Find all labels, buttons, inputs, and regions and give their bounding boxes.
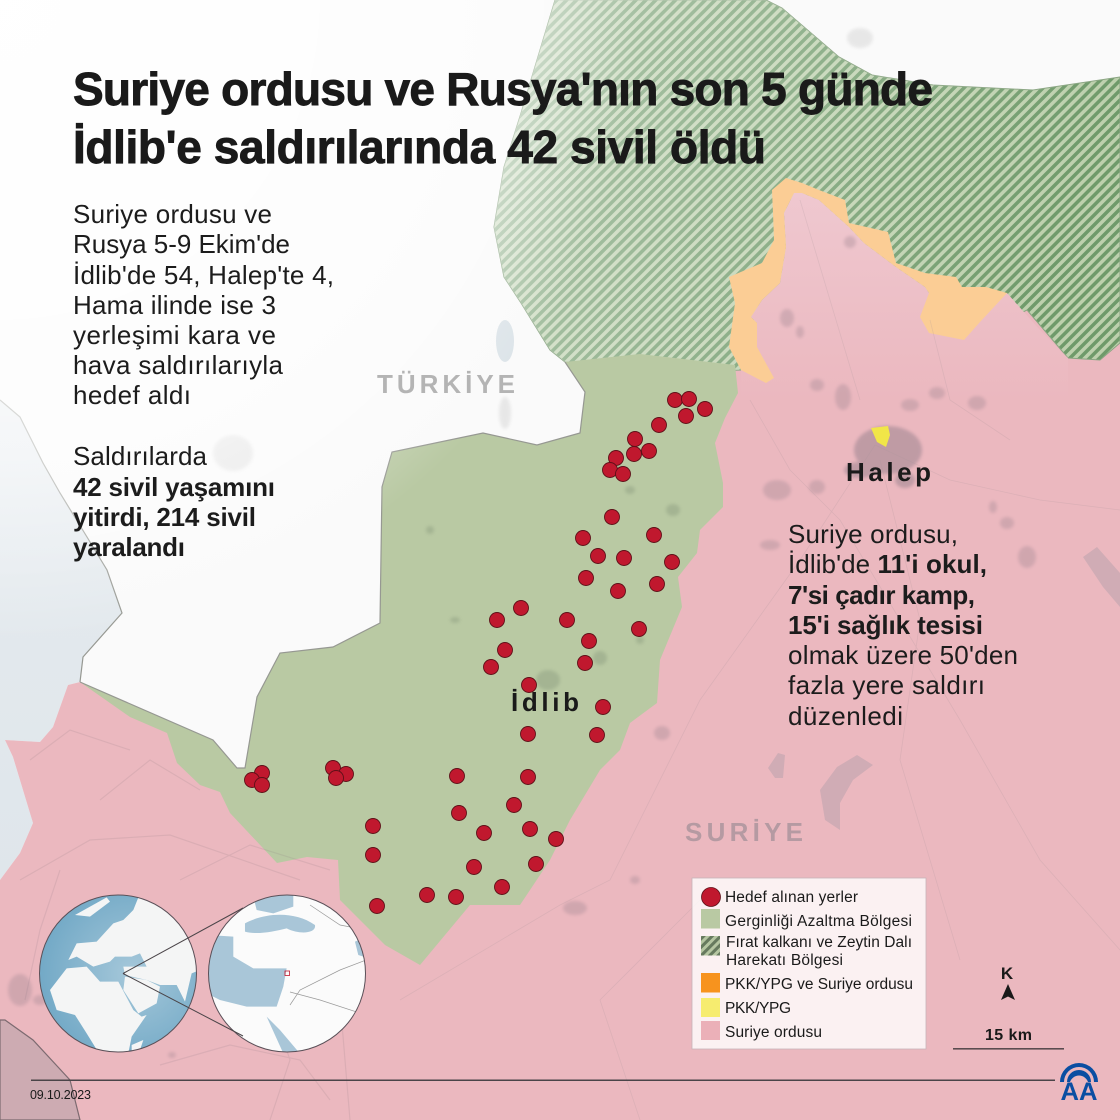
text block: attacks summary: Suriye ordusu ve [73, 199, 272, 229]
Halep yellow area [871, 426, 890, 447]
north arrow [1001, 964, 1015, 1000]
legend: Syrian army [701, 1021, 822, 1041]
title [73, 63, 933, 173]
text block: targets: İdlib'de 11'i okul, [788, 549, 987, 579]
legend: PKK/YPG and Syrian army: PKK/YPG ve Suriye ordusu [725, 976, 913, 993]
city label: İdlib: İdlib [511, 687, 579, 717]
legend: targeted places: Hedef alınan yerler [725, 889, 858, 906]
text block: casualties: yitirdi, 214 sivil [73, 502, 256, 532]
north arrow: K [1001, 964, 1014, 983]
locator square [285, 971, 290, 976]
text block: attacks summary: Hama ilinde ise 3 [73, 290, 276, 320]
text block: attacks summary: Rusya 5-9 Ekim'de [73, 229, 290, 259]
legend [692, 878, 926, 1049]
text block: casualties [73, 441, 275, 562]
text block: targets: düzenledi [788, 701, 903, 731]
locator: world globe [40, 893, 200, 1055]
text block: targets: 7'si çadır kamp, [788, 580, 975, 610]
text block: casualties: 42 sivil yaşamını [73, 472, 275, 502]
country label: Türkiye: TÜRKİYE [377, 369, 515, 399]
legend: de-escalation zone: Gerginliği Azaltma Bölgesi [725, 913, 912, 930]
Syria government area [0, 293, 1120, 1120]
Syria pocket under orange band [740, 193, 1068, 400]
text block: casualties: yaralandı [73, 532, 185, 562]
scale bar [953, 1027, 1064, 1050]
text block: attacks summary: İdlib'de 54, Halep'te 4, [73, 260, 334, 290]
AA logo: AA [1060, 1078, 1098, 1106]
legend: Euphrates Shield and Olive Branch: Fırat kalkanı ve Zeytin Dalı [726, 934, 912, 951]
text block: attacks summary: yerleşimi kara ve [73, 320, 276, 350]
legend: PKK/YPG: PKK/YPG [725, 1000, 791, 1017]
text block: targets: olmak üzere 50'den [788, 640, 1018, 670]
text block: targets: Suriye ordusu, [788, 519, 958, 549]
De-escalation zone [80, 354, 738, 965]
AA logo [1060, 1063, 1098, 1106]
text block: targets [788, 519, 1018, 731]
title: İdlib'e saldırılarında 42 sivil öldü [73, 121, 766, 173]
text block: attacks summary [73, 199, 334, 410]
legend: Euphrates Shield and Olive Branch [701, 934, 912, 969]
legend: Syrian army: Suriye ordusu [725, 1024, 822, 1041]
sea [0, 400, 122, 880]
text block: attacks summary: hava saldırılarıyla [73, 350, 284, 380]
legend: Euphrates Shield and Olive Branch: Harekatı Bölgesi [726, 952, 843, 969]
footer rule [31, 1080, 1055, 1081]
date: 09.10.2023 [30, 1088, 91, 1102]
text block: casualties: Saldırılarda [73, 441, 208, 471]
targeted places [244, 392, 712, 914]
text block: targets: fazla yere saldırı [788, 670, 985, 700]
Euphrates Shield and Olive Branch area [494, 0, 1120, 372]
scale bar: 15 km [985, 1027, 1032, 1044]
city label: Halep: Halep [846, 457, 931, 487]
locator: regional globe [207, 895, 366, 1053]
title: Suriye ordusu ve Rusya'nın son 5 günde [73, 63, 933, 115]
text block: attacks summary: hedef aldı [73, 380, 191, 410]
PKK/YPG and Syrian army band [729, 178, 1007, 383]
lake [496, 320, 514, 362]
text block: targets: 15'i sağlık tesisi [788, 610, 983, 640]
locator connector lines [123, 908, 243, 1036]
country label: Suriye: SURİYE [685, 817, 803, 847]
legend: PKK/YPG [701, 998, 791, 1017]
Turkey border line [0, 362, 585, 768]
bottom-left neighbouring area [0, 1020, 80, 1120]
